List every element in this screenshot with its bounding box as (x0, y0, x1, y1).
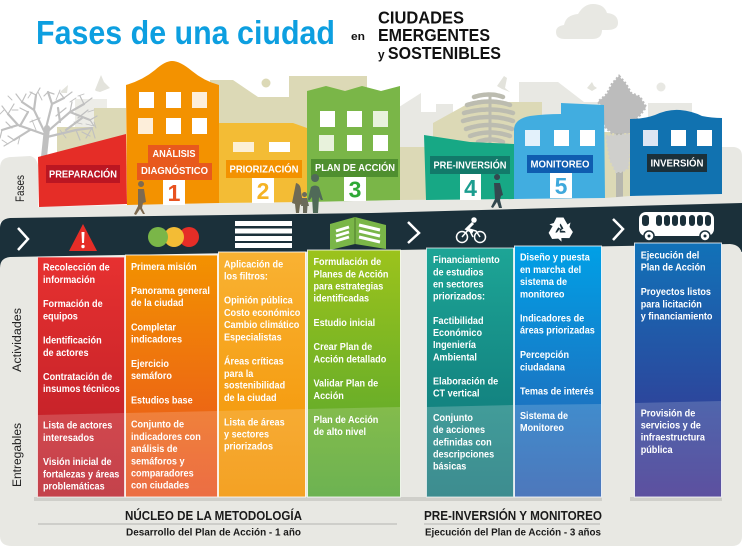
column: monitoreo: monitoreo (520, 289, 565, 300)
column: pre-inversión: Económico (433, 328, 482, 339)
column: análisis diagnóstico: Panorama general (131, 286, 210, 297)
column: priorización: Especialistas (224, 332, 282, 343)
column: pre-inversión: básicas (433, 461, 466, 473)
column: análisis diagnóstico: comparadores (131, 468, 194, 479)
number 5: 5 (555, 173, 568, 199)
footer: núcleo de la metodología: Desarrollo del Plan de Acción - 1 año (126, 527, 301, 539)
building: preparación (38, 134, 127, 207)
column shadow (34, 497, 722, 501)
family silhouettes (292, 174, 323, 213)
column: inversión: Proyectos listos (641, 287, 711, 298)
column: pre-inversión: Factibilidad (433, 316, 484, 327)
icon: bicycle (456, 218, 486, 242)
label: análisis diagnóstico: ANÁLISIS (152, 147, 196, 160)
lower panel (0, 244, 742, 546)
footer: pre-inversión y monitoreo (424, 508, 602, 539)
column: monitoreo: Sistema de (520, 411, 568, 422)
building: análisis diagnóstico (126, 61, 219, 206)
column: plan de acción: Plan de Acción (313, 415, 379, 426)
number 1 (163, 180, 185, 206)
column: monitoreo: Monitoreo (520, 423, 564, 434)
subtitle: ciudades emergentes y sostenibles (378, 8, 501, 63)
column: inversión: para licitación (641, 299, 702, 310)
number 1: 1 (168, 180, 181, 206)
column: inversión: Plan de Acción (641, 262, 706, 274)
column: preparación: Identificación (43, 335, 102, 347)
column: análisis diagnóstico: Primera misión (131, 262, 197, 273)
label: pre-inversión: PRE-INVERSIÓN (434, 158, 506, 172)
dark band (0, 203, 742, 268)
label: análisis diagnóstico: DIAGNÓSTICO (141, 164, 208, 177)
building: priorización (219, 123, 307, 204)
column: pre-inversión: definidas con (433, 437, 492, 448)
subtitle connector: en (351, 31, 365, 43)
column: preparación: fortalezas y áreas (43, 469, 119, 480)
column: plan de acción: Estudio inicial (313, 318, 375, 329)
side label: Actividades: Actividades (12, 308, 24, 372)
column: monitoreo: sistema de (520, 277, 567, 288)
column: análisis diagnóstico (126, 255, 218, 497)
column: priorización: los filtros: (224, 271, 268, 283)
subtitle: ciudades emergentes y sostenibles: CIUDADES (378, 8, 464, 28)
footer: núcleo de la metodología (38, 508, 397, 539)
tree: right (598, 76, 646, 198)
icon: list (235, 221, 292, 248)
column: monitoreo: Percepción (520, 350, 569, 361)
building: pre-inversión (424, 135, 514, 201)
column: preparación: información (43, 275, 95, 286)
column: monitoreo: en marcha del (520, 265, 581, 276)
column: preparación: Contratación de (43, 372, 112, 383)
icon: traffic light (148, 227, 199, 247)
tree: araucaria (463, 94, 513, 145)
icon: open map (330, 217, 386, 250)
column: pre-inversión: en sectores (433, 279, 484, 290)
column: preparación: Visión inicial de (43, 457, 112, 468)
cloud (556, 4, 618, 39)
column: preparación: Lista de actores (43, 420, 112, 432)
background skyline (57, 75, 692, 202)
label: preparación: PREPARACIÓN (49, 168, 117, 180)
column: análisis diagnóstico: semáforos y (131, 456, 185, 467)
column: análisis diagnóstico: Ejercicio (131, 359, 169, 370)
column: pre-inversión: Ingeniería (433, 340, 477, 351)
column: priorización: Costo económico (224, 308, 301, 319)
column: plan de acción: Planes de Acción (313, 269, 389, 280)
column: análisis diagnóstico: de la ciudad (131, 298, 184, 309)
column: pre-inversión: de acciones (433, 425, 485, 436)
icon: warning (69, 224, 97, 251)
column: análisis diagnóstico: indicadores (131, 334, 182, 345)
column: priorización: sostenibilidad (224, 380, 285, 392)
pedestrian right (491, 174, 503, 208)
title: Fases de una ciudad (36, 14, 335, 51)
column: inversión (634, 243, 722, 497)
column: pre-inversión: Elaboración de (433, 376, 498, 387)
column: preparación: Recolección de (43, 262, 110, 274)
icon: bus (639, 212, 714, 241)
column: inversión: Provisión de (641, 408, 695, 420)
footer: núcleo de la metodología: NÚCLEO DE LA METODOLOGÍA (125, 508, 303, 523)
column: inversión: y financiamiento (641, 311, 713, 323)
label: análisis diagnóstico (137, 145, 212, 180)
label: priorización: PRIORIZACIÓN (230, 162, 298, 176)
column: monitoreo (514, 246, 602, 497)
column: plan de acción: para estrategias (313, 281, 383, 292)
column: inversión: infraestructura (641, 432, 706, 444)
column: priorización: Opinión pública (224, 295, 293, 307)
column: pre-inversión (426, 248, 514, 497)
footer: pre-inversión y monitoreo: Ejecución del Plan de Acción - 3 años (425, 527, 601, 539)
column: priorización: Aplicación de (224, 259, 283, 270)
column: monitoreo: Diseño y puesta (520, 252, 590, 264)
column: priorización (218, 252, 306, 497)
column: preparación: Formación de (43, 299, 103, 310)
column: análisis diagnóstico: indicadores con (131, 432, 201, 443)
side label: Fases: Fases (15, 175, 27, 202)
column: priorización: Lista de áreas (224, 417, 285, 428)
pedestrian (134, 181, 146, 215)
ground band: Fases (0, 147, 742, 222)
arrow 1 (18, 228, 28, 250)
column: pre-inversión: Ambiental (433, 352, 477, 363)
column: priorización: priorizados (224, 441, 273, 453)
column: análisis diagnóstico: análisis de (131, 444, 178, 455)
column: preparación: interesados (43, 433, 94, 444)
building: inversión (630, 110, 722, 196)
arrow 3 (613, 219, 623, 240)
column: priorización: Áreas críticas (224, 356, 284, 368)
column: análisis diagnóstico: Completar (131, 322, 176, 333)
column: pre-inversión: priorizados: (433, 291, 485, 302)
column: monitoreo: ciudadana (520, 362, 566, 373)
column: plan de acción (308, 250, 400, 497)
column: monitoreo: Indicadores de (520, 313, 584, 325)
column: priorización: para la (224, 369, 254, 380)
column: preparación: insumos técnicos (43, 384, 120, 395)
tree: left (0, 88, 97, 157)
label: plan de acción: PLAN DE ACCIÓN (315, 161, 395, 174)
column: plan de acción: Acción (313, 391, 344, 402)
column: inversión: servicios y de (641, 420, 701, 432)
column: preparación: problemáticas (43, 481, 105, 493)
column: pre-inversión: descripciones (433, 449, 494, 460)
column: plan de acción: identificadas (313, 293, 369, 305)
column: inversión: Ejecución del (641, 250, 699, 262)
icon: recycling (545, 218, 575, 244)
column: plan de acción: Formulación de (313, 257, 381, 268)
number 3: 3 (349, 176, 361, 202)
building: plan de acción (307, 86, 400, 202)
column: análisis diagnóstico: semáforo (131, 371, 172, 382)
number 2: 2 (257, 178, 269, 204)
label: monitoreo: MONITOREO (530, 158, 590, 170)
column: plan de acción: de alto nivel (313, 427, 366, 438)
column: pre-inversión: Financiamiento (433, 255, 500, 266)
building: monitoreo (514, 103, 605, 199)
column: monitoreo: Temas de interés (520, 386, 594, 397)
side label: Entregables: Entregables (12, 423, 24, 487)
column: plan de acción: Validar Plan de (313, 378, 378, 390)
number 4: 4 (464, 175, 477, 201)
column: análisis diagnóstico: Conjunto de (131, 419, 184, 431)
column: análisis diagnóstico: Estudios base (131, 395, 193, 406)
column: preparación: de actores (43, 348, 89, 359)
column: preparación (38, 257, 124, 497)
column: monitoreo: áreas priorizadas (520, 325, 595, 337)
column: pre-inversión: Conjunto (433, 413, 473, 424)
column: inversión: pública (641, 445, 673, 456)
column: plan de acción: Acción detallado (313, 354, 386, 365)
footer: pre-inversión y monitoreo: PRE-INVERSIÓN Y MONITOREO (424, 508, 602, 523)
label: inversión: INVERSIÓN (650, 156, 704, 170)
arrow 2 (408, 222, 419, 243)
column: análisis diagnóstico: con ciudades (131, 480, 189, 492)
subtitle: ciudades emergentes y sostenibles: EMERGENTES (378, 25, 490, 45)
column: pre-inversión: de estudios (433, 267, 484, 278)
subtitle: ciudades emergentes y sostenibles: y SOSTENIBLES (378, 43, 501, 63)
column: priorización: Cambio climático (224, 320, 300, 331)
column: pre-inversión: CT vertical (433, 388, 480, 400)
column: priorización: de la ciudad (224, 393, 277, 404)
column: priorización: y sectores (224, 429, 269, 441)
column: plan de acción: Crear Plan de (313, 342, 372, 353)
column: preparación: equipos (43, 311, 78, 323)
